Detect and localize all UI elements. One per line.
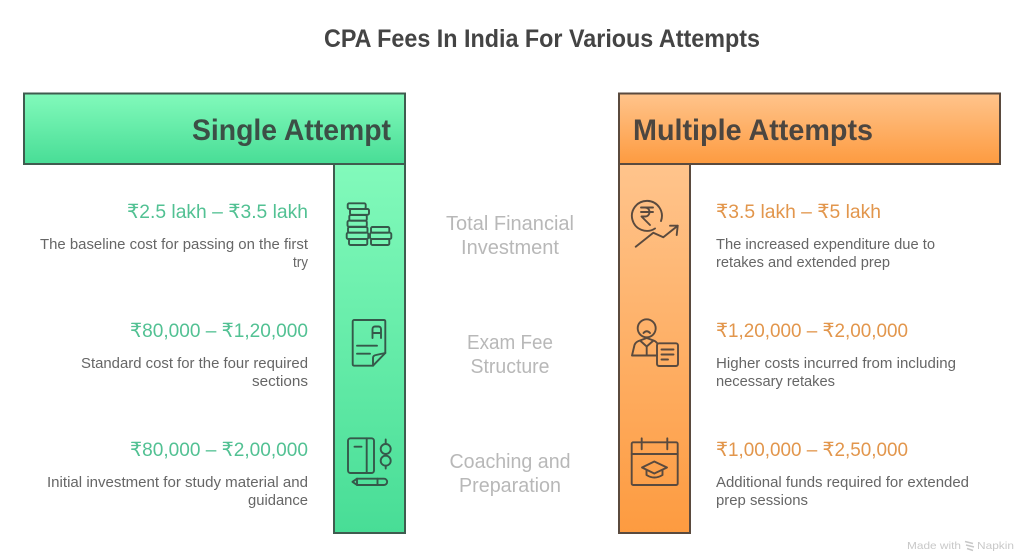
label: coaching and preparation [450,450,570,497]
column: multiple attempts [619,164,690,533]
icon: notebook and pencil [348,438,391,485]
text: multiple attempts coaching [716,439,969,509]
footer: made with napkin: Made with [907,540,961,552]
text: single attempt exam [81,320,308,390]
text: multiple attempts total [716,201,935,271]
text: single attempt coaching: guidance [248,492,308,509]
icon: coin stacks [347,203,391,245]
label: total financial investment [446,212,574,259]
header: single attempt: Single Attempt [192,114,391,147]
label: exam fee structure: Structure [470,355,550,378]
text: single attempt coaching: ₹80,000 – ₹2,00,000 [130,439,308,461]
column: single attempt [334,164,405,533]
text: single attempt total: ₹2.5 lakh – ₹3.5 lakh [127,201,308,223]
text: multiple attempts exam [716,320,956,390]
icon: calendar with graduation cap [632,438,678,485]
icon: rupee growth [632,201,678,247]
header: multiple attempts [619,94,1000,164]
text: multiple attempts total: retakes and extended prep [716,254,890,271]
label: coaching and preparation: Coaching and [450,450,570,473]
text: single attempt exam: sections [252,373,308,390]
icon: graded paper [353,320,385,366]
text: multiple attempts coaching: ₹1,00,000 – ₹2,50,000 [716,439,908,461]
text: multiple attempts exam: ₹1,20,000 – ₹2,00,000 [716,320,908,342]
text: single attempt total [40,201,309,271]
text: single attempt total: The baseline cost for passing on the first [40,236,309,253]
text: multiple attempts total: ₹3.5 lakh – ₹5 lakh [716,201,881,223]
icon: person with document [632,319,678,366]
panel: multiple attempts [619,94,1000,533]
header: single attempt [24,94,405,164]
panel: single attempt [24,94,405,533]
text: single attempt total: try [293,254,308,271]
text: single attempt coaching [47,439,308,509]
label: exam fee structure [467,331,553,378]
label: total financial investment: Total Financial [446,212,574,235]
label: exam fee structure: Exam Fee [467,331,553,354]
text: single attempt exam: Standard cost for the four required [81,355,308,372]
text: single attempt coaching: Initial investment for study material and [47,474,308,491]
text: multiple attempts coaching: prep sessions [716,492,808,509]
text: multiple attempts exam: necessary retakes [716,373,835,390]
text: multiple attempts total: The increased expenditure due to [716,236,935,253]
footer: made with napkin [907,540,1014,552]
footer: made with napkin: Napkin [977,540,1014,552]
label: coaching and preparation: Preparation [459,474,561,497]
header: multiple attempts: Multiple Attempts [633,114,873,147]
title: CPA Fees In India For Various Attempts [324,25,760,53]
text: multiple attempts coaching: Additional funds required for extended [716,474,969,491]
text: single attempt exam: ₹80,000 – ₹1,20,000 [130,320,308,342]
label: total financial investment: Investment [461,236,559,259]
text: multiple attempts exam: Higher costs incurred from including [716,355,956,372]
